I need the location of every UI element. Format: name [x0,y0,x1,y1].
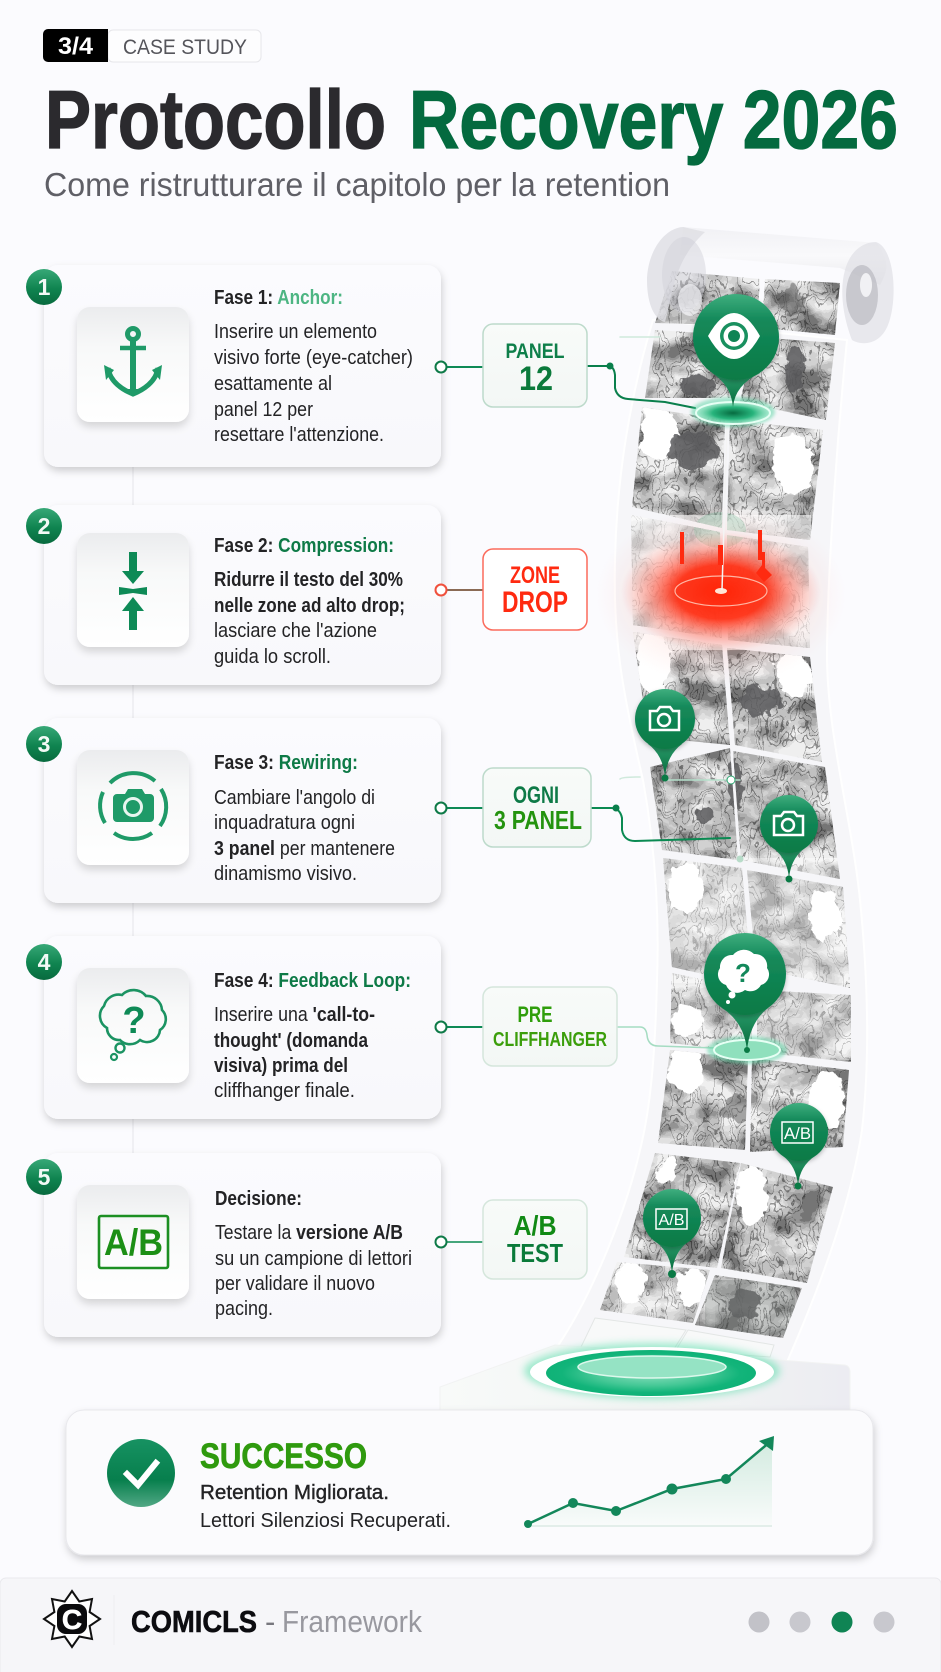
card 5 text: pacing. [215,1298,273,1320]
card 3 text: Fase 3: Rewiring: [214,752,358,774]
card 4 text: thought' (domanda [214,1030,369,1052]
step number 3 [26,726,62,762]
scroll strip illustration [581,271,851,1358]
header badge: 3/4 [58,33,94,60]
focus ring under eye pin [691,397,775,427]
pin: camera upper [635,689,695,782]
base platform [440,1343,850,1412]
red drop zone glow [596,425,846,685]
brand text [131,1604,422,1639]
icon box: A/B [77,1185,189,1299]
success text: Retention Migliorata. [200,1482,389,1504]
top roller [647,227,894,343]
pagination dots [748,1612,894,1632]
card 2: compression [26,505,441,685]
card 3 text: 3 panel per mantenere [214,838,395,860]
title: Protocollo [45,73,386,166]
pin: question cloud: ? [735,958,751,988]
card 3 text: inquadratura ogni [214,812,355,834]
step number 5 [26,1159,62,1195]
icon box: A/B: A/B [104,1222,163,1263]
card 1 text: Inserire un elemento [214,321,377,343]
tag: panel 12 [483,324,587,407]
icon box: rotating camera [77,750,189,865]
title [45,73,898,166]
card 4 text: visiva) prima del [214,1055,348,1077]
tag: A/B test: TEST [507,1238,563,1268]
card 3 text [214,752,395,885]
brand text: COMICLS [131,1604,257,1639]
pin: camera lower [760,795,818,882]
card 2 text: Fase 2: Compression: [214,535,394,557]
card 2 text: Ridurre il testo del 30% [214,569,403,591]
tag: pre cliffhanger [483,987,617,1066]
tag: panel 12: PANEL [506,340,565,363]
tag: panel 12: 12 [519,360,553,398]
pin: question cloud [704,933,786,1053]
card 1 text: Fase 1: Anchor: [214,287,343,309]
tag: zone drop: DROP [502,586,568,619]
tag: zone drop: ZONE [510,562,560,589]
pin: A/B right: A/B [784,1124,811,1143]
step number 2: 2 [38,513,50,539]
pin: A/B left: A/B [658,1212,684,1229]
card 3 text: Cambiare l'angolo di [214,787,375,809]
step number 2 [26,508,62,544]
brand text: - [265,1604,275,1639]
success text [200,1437,451,1532]
header badge [43,29,261,62]
brand text: Framework [282,1604,422,1639]
logo [44,1591,100,1647]
icon box: thought bubble: ? [122,1000,146,1042]
card 5 text: Decisione: [215,1188,302,1210]
step number 5: 5 [38,1164,51,1190]
strip body [555,320,867,1380]
step number 4 [26,944,62,980]
subtitle: Come ristrutturare il capitolo per la retention [44,166,670,203]
card 3: rewiring [26,718,441,903]
card 5 text: Testare la versione A/B [215,1222,403,1244]
card 4 text: Fase 4: Feedback Loop: [214,970,411,992]
card 4 text: Inserire una 'call-to- [214,1004,375,1026]
success text: SUCCESSO [200,1437,367,1476]
logo: C [62,1604,82,1635]
pin: A/B left [643,1189,701,1278]
icon box: anchor [77,307,189,422]
tag: zone drop [483,549,587,630]
card 3 text: dinamismo visivo. [214,863,357,885]
pin: eye [693,294,779,407]
tag: ogni 3 panel [483,768,591,847]
card 4: feedback loop [26,936,441,1119]
tag: A/B test: A/B [514,1210,556,1241]
card 2 text: guida lo scroll. [214,646,331,668]
step number 1: 1 [38,274,51,300]
card 4 text: cliffhanger finale. [214,1080,355,1102]
card 1 text: esattamente al [214,373,332,395]
tag: ogni 3 panel: 3 PANEL [494,805,582,835]
header badge: CASE STUDY [123,36,247,59]
success text: Lettori Silenziosi Recuperati. [200,1510,451,1532]
step number 4: 4 [38,949,51,975]
growth line chart [524,1436,774,1528]
icon box: thought bubble [77,968,189,1083]
pale last row [581,1318,774,1357]
card 2 text [214,535,405,668]
glowing landing ring [524,1343,780,1399]
card 5 text: per validare il nuovo [215,1273,375,1295]
card 1 text: visivo forte (eye-catcher) [214,347,413,369]
card 5 text [215,1188,412,1320]
card 1 text: resettare l'attenzione. [214,424,384,446]
card 4 text [214,970,411,1102]
card 1: anchor [26,265,441,467]
tag: pre cliffhanger: PRE [518,1002,552,1027]
step rail [132,467,134,1153]
success card [66,1410,873,1555]
card 2 text: nelle zone ad alto drop; [214,595,405,617]
pin: A/B right [770,1103,828,1190]
step number 1 [26,269,62,305]
step number 3: 3 [38,731,50,757]
footer bar [0,1578,941,1672]
tag: ogni 3 panel: OGNI [513,782,559,809]
connector lines from cards to tags and pins [436,337,744,1248]
icon: check badge [107,1439,175,1507]
tag: pre cliffhanger: CLIFFHANGER [493,1029,607,1051]
card 5: decisione [26,1153,441,1337]
card 2 text: lasciare che l'azione [214,620,377,642]
card 5 text: su un campione di lettori [215,1248,412,1270]
icon box: compression arrows [77,533,189,647]
card 1 text: panel 12 per [214,399,313,421]
card 1 text [214,287,413,446]
focus ring under question pin [707,1036,787,1064]
drop arrows [680,530,772,582]
manga panels [600,271,851,1338]
tag: A/B test [483,1200,587,1279]
